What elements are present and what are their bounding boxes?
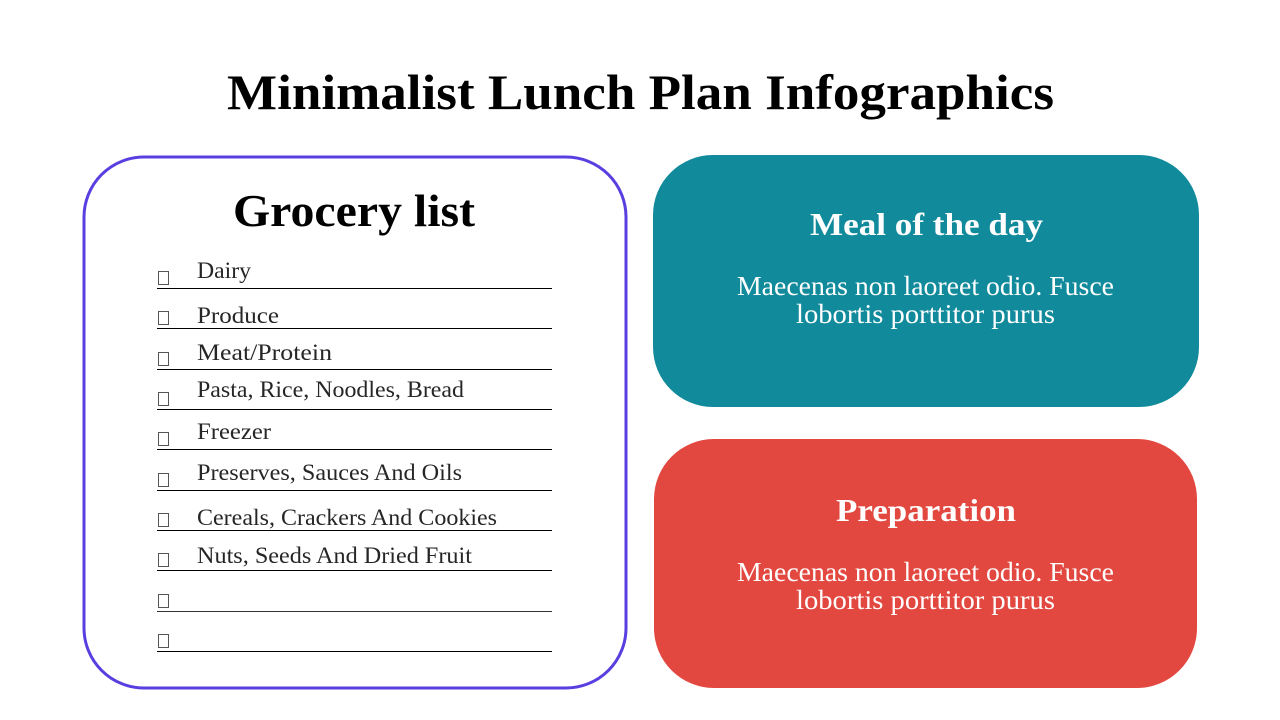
item: nuts, seeds and dried fruit: Nuts, Seeds And Dried Fruit [197,543,473,568]
item: produce: Produce [197,303,279,328]
empty item row 10 [157,634,552,652]
text: meal description: Maecenas non laoreet odio. Fusce [737,271,1114,301]
item: preserves, sauces and oils: Preserves, Sauces And Oils [197,460,462,485]
title: Minimalist Lunch Plan Infographics [227,64,1054,120]
empty item row 9 [157,594,552,612]
text: preparation description: lobortis porttitor purus [796,585,1055,615]
item: dairy [157,258,552,288]
item: pasta, rice, noodles, bread [157,377,552,410]
item: nuts, seeds and dried fruit [157,543,552,570]
text: meal description: lobortis porttitor purus [796,299,1055,329]
text: preparation description: Maecenas non laoreet odio. Fusce [737,557,1114,587]
heading: preparation: Preparation [836,492,1016,528]
heading: grocery list: Grocery list [233,186,475,236]
item: meat and protein [157,340,552,370]
item: preserves, sauces and oils [157,460,552,490]
item: freezer [157,419,552,450]
text: meal description [737,271,1114,329]
panel: meal of the day [653,155,1199,407]
heading: meal of the day: Meal of the day [810,206,1043,242]
item: dairy: Dairy [197,258,252,283]
item: produce [157,303,552,328]
text: preparation description [737,557,1114,615]
panel: grocery list [84,157,626,688]
item: cereals, crackers and cookies: Cereals, Crackers And Cookies [197,505,497,530]
item: freezer: Freezer [197,419,271,444]
panel: preparation [654,439,1197,688]
item: pasta, rice, noodles, bread: Pasta, Rice, Noodles, Bread [197,377,465,402]
item: meat and protein: Meat/Protein [197,340,333,365]
